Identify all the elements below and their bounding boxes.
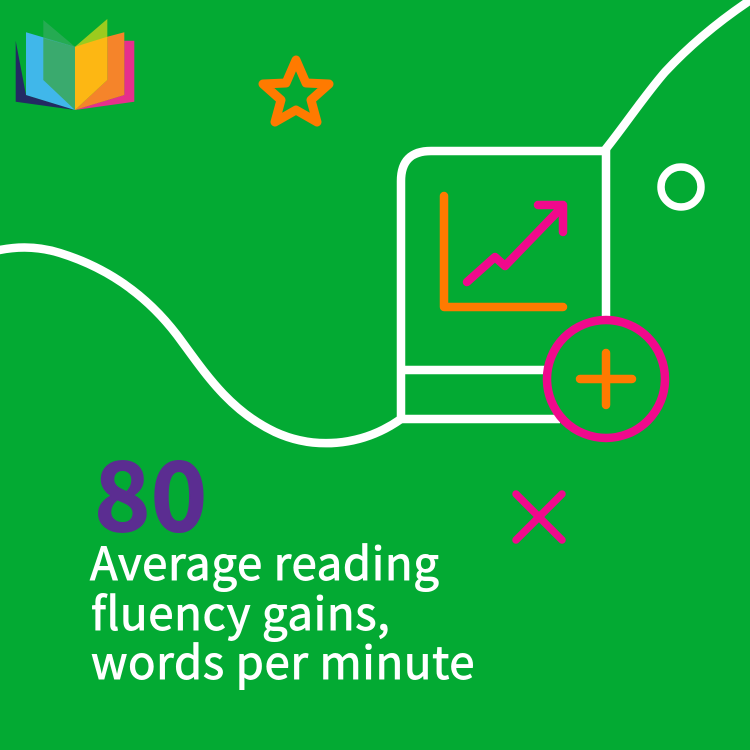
wavy line: left	[0, 248, 401, 443]
icon: book outline	[401, 151, 606, 419]
icon: chart axes	[444, 196, 563, 307]
caption: words per minute	[91, 627, 475, 693]
caption	[90, 528, 475, 693]
icon: rising arrow	[467, 205, 563, 282]
big number: 80	[94, 420, 207, 559]
icon: white ring	[661, 167, 701, 207]
caption: Average reading	[90, 528, 440, 594]
icon: pink cross	[516, 494, 562, 540]
icon: colourful open book logo	[16, 19, 134, 110]
wavy line: top right	[605, 0, 750, 150]
icon: orange star	[263, 60, 329, 122]
caption: fluency gains,	[91, 578, 390, 644]
icon: plus in circle	[547, 320, 665, 438]
